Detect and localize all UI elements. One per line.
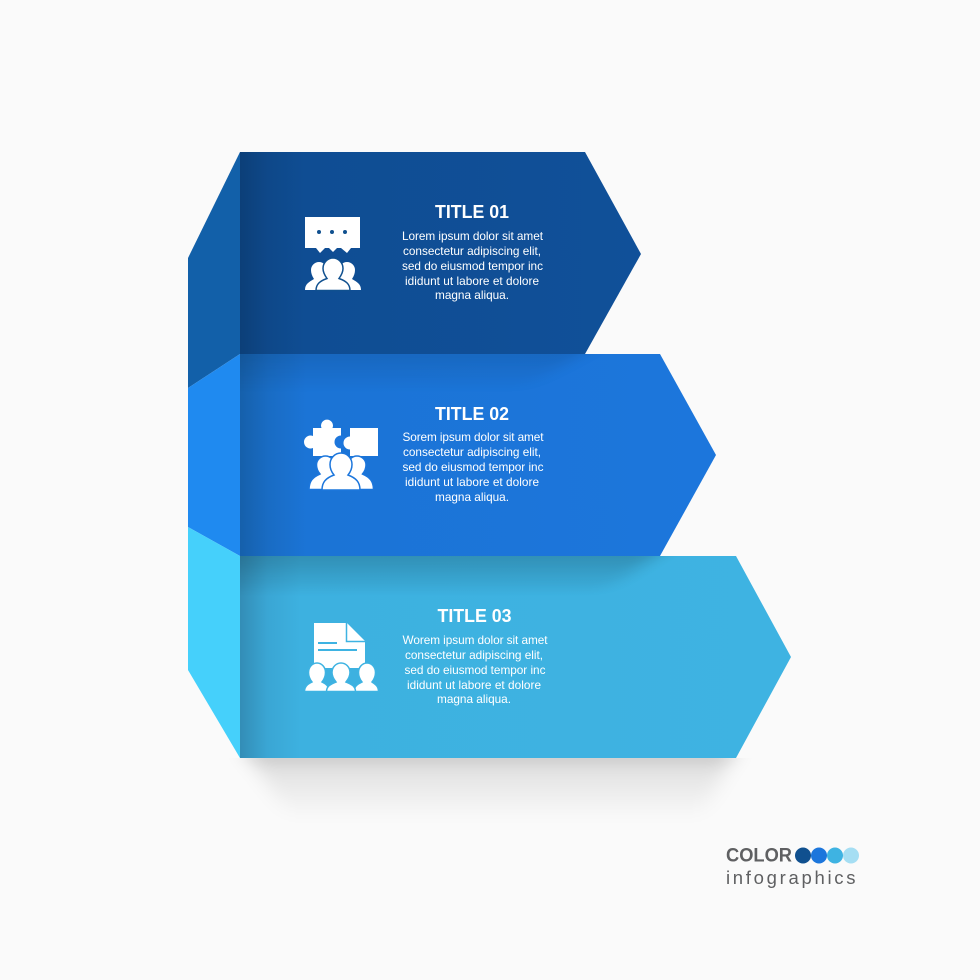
text block 02: Sorem ipsum dolor sit amet <box>402 430 544 444</box>
text block 01: consectetur adipiscing elit, <box>403 244 541 258</box>
text block 03: Worem ipsum dolor sit amet <box>402 633 548 647</box>
logo colour dots <box>795 848 859 864</box>
title 02: TITLE 02 <box>435 404 509 424</box>
arrow body 01 <box>240 152 641 354</box>
ground shadow <box>242 758 740 802</box>
text block 03 <box>402 633 548 706</box>
arrow body 03 <box>240 556 791 758</box>
logo: color infographics <box>726 846 859 888</box>
icon: document and people <box>304 623 378 692</box>
arrow body 02 <box>240 354 716 556</box>
panel: arrow 02 <box>188 354 716 556</box>
text block 01: ididunt ut labore et dolore <box>405 274 539 288</box>
text block 03: magna aliqua. <box>437 692 511 706</box>
text block 01 <box>402 229 544 302</box>
title 03: TITLE 03 <box>438 606 512 626</box>
text block 02: sed do eiusmod tempor inc <box>402 460 544 474</box>
logo word COLOR: COLOR <box>726 846 792 866</box>
fold shadow under arrow 02 <box>240 556 666 588</box>
title 01: TITLE 01 <box>435 202 509 222</box>
panel: arrow 03 <box>188 527 791 758</box>
text block 01: magna aliqua. <box>435 288 509 302</box>
left flap 02 <box>188 354 240 556</box>
logo word infographics: infographics <box>726 867 858 888</box>
panel: arrow 01 <box>188 152 641 388</box>
text block 01: sed do eiusmod tempor inc <box>402 259 543 273</box>
text block 03: sed do eiusmod tempor inc <box>404 663 546 677</box>
icon: speech bubble and people <box>305 217 361 290</box>
text block 02 <box>402 430 544 504</box>
text block 03: ididunt ut labore et dolore <box>407 678 541 692</box>
left flap 01 <box>188 152 240 388</box>
icon: puzzle and people <box>304 420 378 490</box>
text block 03: consectetur adipiscing elit, <box>405 648 543 662</box>
text block 02: ididunt ut labore et dolore <box>405 475 539 489</box>
text block 02: magna aliqua. <box>435 490 509 504</box>
fold shadow under arrow 01 <box>240 354 587 378</box>
left flap 03 <box>188 527 240 758</box>
text block 02: consectetur adipiscing elit, <box>403 445 541 459</box>
text block 01: Lorem ipsum dolor sit amet <box>402 229 544 243</box>
